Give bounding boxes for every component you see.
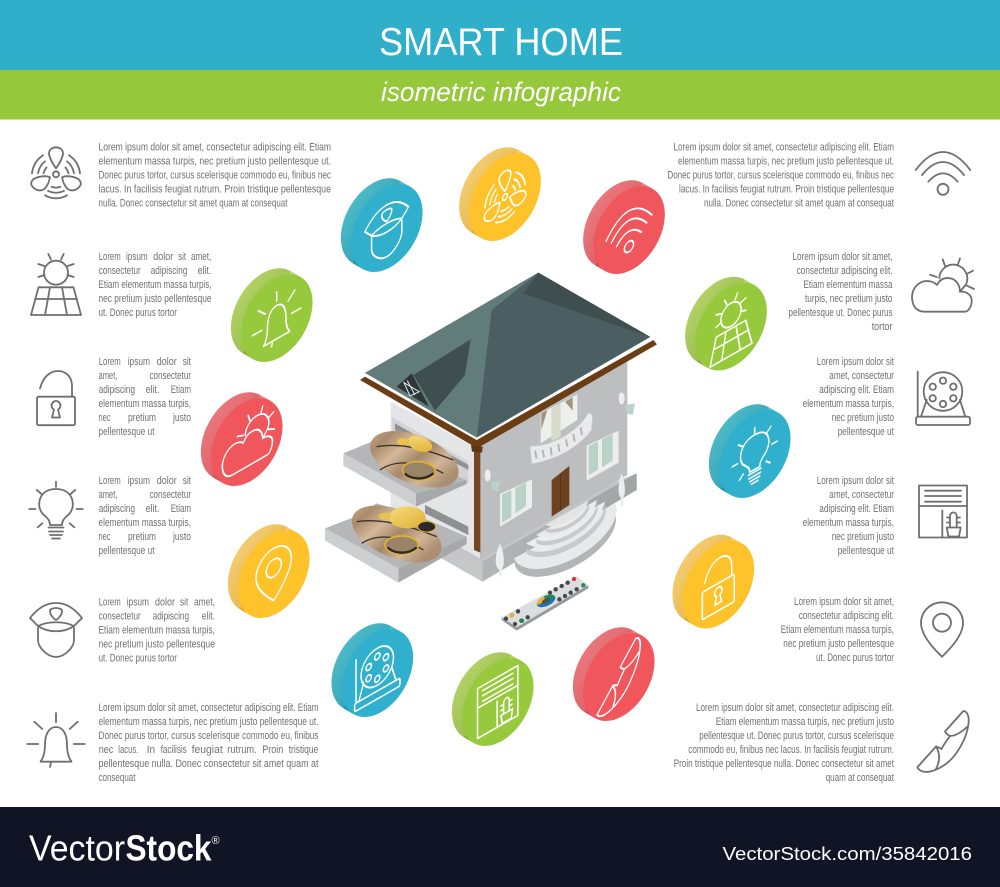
text block left 6: rutrum. — [227, 744, 257, 756]
text block right 5: consectetur adipiscing elit. — [799, 610, 894, 622]
column finial right — [619, 473, 625, 507]
text block left 4: ipsum — [128, 475, 150, 487]
text block right 6: pellentesque ut. Donec purus tortor, cursus scelerisque — [699, 730, 894, 742]
text block left 6: pellentesque nulla. Donec consectetur sit amet quam at — [98, 758, 318, 770]
text block right 2 — [788, 251, 893, 333]
text block right 1: Donec purus tortor, cursus scelerisque commodo eu, finibus nec — [668, 170, 894, 182]
right column icon: cloud and sun — [912, 258, 974, 312]
downpipe — [471, 445, 483, 553]
wall lamps — [485, 392, 635, 492]
text block right 6: quam at consequat — [826, 772, 894, 784]
window right — [587, 431, 619, 481]
right column icon: window shutter — [919, 486, 967, 538]
right column icon: map pin — [921, 602, 963, 657]
text block left 5: dolor — [155, 596, 175, 608]
text block right 2: Etiam elementum massa — [804, 279, 893, 291]
header band: title — [0, 0, 1000, 70]
text block left 5: sit — [180, 596, 188, 608]
text block right 3: nec pretium justo — [832, 412, 894, 424]
text block left 3: dolor — [157, 356, 177, 368]
text block left 2: amet, — [191, 251, 211, 263]
text block left 6 — [98, 702, 319, 784]
text block left 4: amet, — [98, 489, 118, 501]
balcony — [530, 413, 593, 464]
text block right 1: Lorem ipsum dolor sit amet, consectetur adipiscing elit. Etiam — [674, 142, 894, 154]
left column icon: security guard — [30, 603, 82, 657]
text block left 2: dolor — [153, 251, 174, 263]
lower clockwork disc — [344, 494, 450, 574]
disc: light bulb — [694, 392, 805, 511]
text block left 4: Etiam — [171, 503, 191, 515]
text block left 2: ut. Donec purus tortor — [98, 307, 177, 319]
text block left 6: tristique — [289, 744, 318, 756]
text block left 6: Proin — [262, 744, 283, 756]
text block right 4: elementum massa turpis, — [803, 517, 894, 529]
text block left 3: pretium — [128, 412, 156, 424]
footer logo: Vector — [29, 828, 125, 868]
text block left 1: nulla. Donec consectetur sit amet quam at consequat — [98, 198, 288, 210]
text block left 1: lacus. In facilisis feugiat rutrum. Proin tristique pellentesque — [98, 184, 331, 196]
text block left 2: consectetur — [99, 265, 141, 277]
subtitle: isometric infographic — [381, 77, 621, 107]
left column icon: alarm bell — [27, 713, 85, 767]
text block left 1: Lorem ipsum dolor sit amet, consectetur adipiscing elit. Etiam — [98, 142, 331, 154]
text block right 2: turpis, nec pretium justo — [805, 293, 892, 305]
right column icon: film reel — [916, 372, 970, 425]
text block left 3: elementum massa turpis, — [98, 398, 191, 410]
text block left 3: elit. — [146, 384, 159, 396]
right wall — [480, 362, 627, 560]
text block left 4: nec — [98, 531, 111, 543]
text block right 4: nec pretium justo — [832, 531, 894, 543]
remote dial — [535, 592, 557, 610]
text block left 6: Lorem ipsum dolor sit amet, consectetur adipiscing elit. Etiam — [98, 702, 318, 714]
balcony door and curtains — [541, 394, 577, 443]
text block right 2: consectetur adipiscing elit. — [797, 265, 892, 277]
lower drawer — [325, 494, 468, 583]
column finial left — [496, 543, 504, 577]
text block left 4: dolor — [157, 475, 177, 487]
roof — [364, 273, 651, 438]
text block left 6: lacus. — [118, 744, 138, 756]
text block right 5: Lorem ipsum dolor sit amet, — [794, 596, 894, 608]
text block left 5: ipsum — [127, 596, 149, 608]
right column icon: phone — [917, 711, 969, 772]
text block left 5: elit. — [202, 610, 215, 622]
text block left 5: consectetur — [99, 610, 141, 622]
text block left 5: Lorem — [99, 596, 121, 608]
text block right 5: ut. Donec purus tortor — [816, 652, 894, 664]
text block left 5: nec pretium justo pellentesque — [98, 638, 215, 650]
upper clockwork disc — [362, 420, 467, 499]
disc: film reel — [317, 611, 428, 730]
footer band — [0, 807, 1000, 887]
left column icon: solar panel — [31, 254, 81, 315]
text block left 4: elit. — [146, 503, 159, 515]
disc: map pin — [213, 512, 324, 631]
text block left 3: Lorem — [99, 356, 121, 368]
text block right 1: elementum massa turpis, nec pretium justo pellentesque ut. — [678, 156, 894, 168]
text block left 4: justo — [172, 531, 191, 543]
text block right 5: nec pretium justo pellentesque — [783, 638, 894, 650]
text block left 1 — [98, 142, 331, 210]
text block left 4: consectetur — [150, 489, 191, 501]
text block left 5: ut. Donec purus tortor — [98, 652, 177, 664]
text block left 6: elementum massa turpis, nec pretium justo pellentesque ut. — [98, 716, 318, 728]
text block left 4: pellentesque ut — [98, 545, 154, 557]
text block right 3: pellentesque ut — [838, 426, 894, 438]
text block left 3: ipsum — [128, 356, 150, 368]
text block left 2: elit. — [198, 265, 211, 277]
disc: solar panel — [670, 264, 782, 383]
text block right 3: adipiscing elit. Etiam — [819, 384, 894, 396]
text block left 4: pretium — [128, 531, 156, 543]
text block left 3: consectetur — [150, 370, 191, 382]
text block left 4 — [98, 475, 191, 557]
upper drawer — [343, 417, 468, 507]
text block left 4: adipiscing — [99, 503, 135, 515]
text block left 4: sit — [183, 475, 191, 487]
footer image id: VectorStock.com/35842016 — [722, 844, 972, 864]
text block right 2: tortor — [872, 321, 893, 333]
text block right 3: amet, consectetur — [829, 370, 894, 382]
text block left 2: ipsum — [126, 251, 148, 263]
curved stairs — [514, 500, 616, 577]
text block right 6 — [674, 702, 894, 784]
disc: cloud and sun — [186, 380, 297, 499]
left column icon: open lock — [37, 371, 75, 425]
footer band: ® — [212, 835, 220, 847]
text block left 3: nec — [98, 412, 111, 424]
text block left 2: sit — [178, 251, 186, 263]
text block right 3: Lorem ipsum dolor sit — [817, 356, 894, 368]
disc: wifi — [568, 168, 680, 287]
text block right 4: Lorem ipsum dolor sit — [817, 475, 894, 487]
text block right 6: Lorem ipsum dolor sit amet, consectetur adipiscing elit. — [696, 702, 894, 714]
left column icon: light bulb — [29, 482, 83, 538]
text block right 2: Lorem ipsum dolor sit amet, — [792, 251, 892, 263]
disc: window shutter — [437, 640, 548, 759]
plinth — [442, 473, 637, 582]
text block right 1: lacus. In facilisis feugiat rutrum. Proin tristique pellentesque — [679, 184, 894, 196]
isometric house — [325, 273, 657, 631]
text block left 3: sit — [183, 356, 191, 368]
text block right 1: nulla. Donec consectetur sit amet quam at consequat — [704, 198, 894, 210]
text block left 5 — [98, 596, 215, 664]
text block right 4 — [803, 475, 894, 557]
text block left 6: Donec purus tortor, cursus scelerisque commodo eu, finibus — [98, 730, 319, 742]
text block left 6: consequat — [98, 772, 136, 784]
text block left 6: In — [147, 744, 155, 756]
door — [552, 466, 569, 517]
disc: phone — [558, 615, 669, 734]
subtitle band — [0, 70, 1000, 120]
text block left 1: elementum massa turpis, nec pretium justo pellentesque ut. — [98, 156, 331, 168]
text block right 2: pellentesque ut. Donec purus — [788, 307, 893, 319]
text block right 4: pellentesque ut — [838, 545, 894, 557]
text block left 2: nec pretium justo pellentesque — [98, 293, 212, 305]
text block right 5: Etiam elementum massa turpis, — [781, 624, 894, 636]
text block left 3: Etiam — [171, 384, 191, 396]
footer band: Stock — [126, 828, 212, 868]
text block left 5: amet, — [194, 596, 215, 608]
text block right 3 — [803, 356, 894, 438]
text block left 5: adipiscing — [153, 610, 189, 622]
disc: security guard — [326, 166, 437, 285]
text block left 6: facilisis — [161, 744, 187, 756]
text block left 6: nec — [99, 744, 114, 756]
text block left 2: Lorem — [99, 251, 121, 263]
text block left 2 — [98, 251, 212, 319]
text block left 3 — [98, 356, 191, 438]
right column icon: wifi — [916, 152, 970, 195]
text block right 5 — [781, 596, 894, 664]
left wall — [391, 402, 480, 558]
text block left 3: justo — [172, 412, 191, 424]
disc: alarm bell — [216, 256, 327, 375]
disc: fan — [444, 135, 556, 254]
disc: lock — [658, 522, 769, 641]
text block left 4: Lorem — [99, 475, 121, 487]
left column icon: fan — [31, 147, 81, 198]
title: SMART HOME — [379, 21, 623, 64]
window left — [500, 479, 532, 527]
text block left 6: feugiat — [192, 744, 223, 756]
text block right 6: Etiam elementum massa turpis, nec pretium justo — [716, 716, 894, 728]
text block left 3: pellentesque ut — [98, 426, 154, 438]
text block left 1: Donec purus tortor, cursus scelerisque commodo eu, finibus nec — [98, 170, 331, 182]
text block left 2: Etiam elementum massa turpis, — [98, 279, 212, 291]
text block left 5: Etiam elementum massa turpis, — [98, 624, 215, 636]
text block left 2: adipiscing — [151, 265, 187, 277]
text block right 4: amet, consectetur — [829, 489, 894, 501]
text block left 4: elementum massa turpis, — [98, 517, 191, 529]
text block right 3: elementum massa turpis, — [803, 398, 894, 410]
text block right 6: Proin tristique pellentesque nulla. Donec consectetur sit amet — [674, 758, 894, 770]
gutter — [360, 340, 657, 447]
text block right 4: adipiscing elit. Etiam — [819, 503, 894, 515]
text block right 6: commodo eu, finibus nec lacus. In facilisis feugiat rutrum. — [688, 744, 894, 756]
text block left 3: amet, — [98, 370, 118, 382]
text block left 3: adipiscing — [99, 384, 135, 396]
remote control — [502, 577, 588, 631]
text block right 1 — [668, 142, 894, 210]
